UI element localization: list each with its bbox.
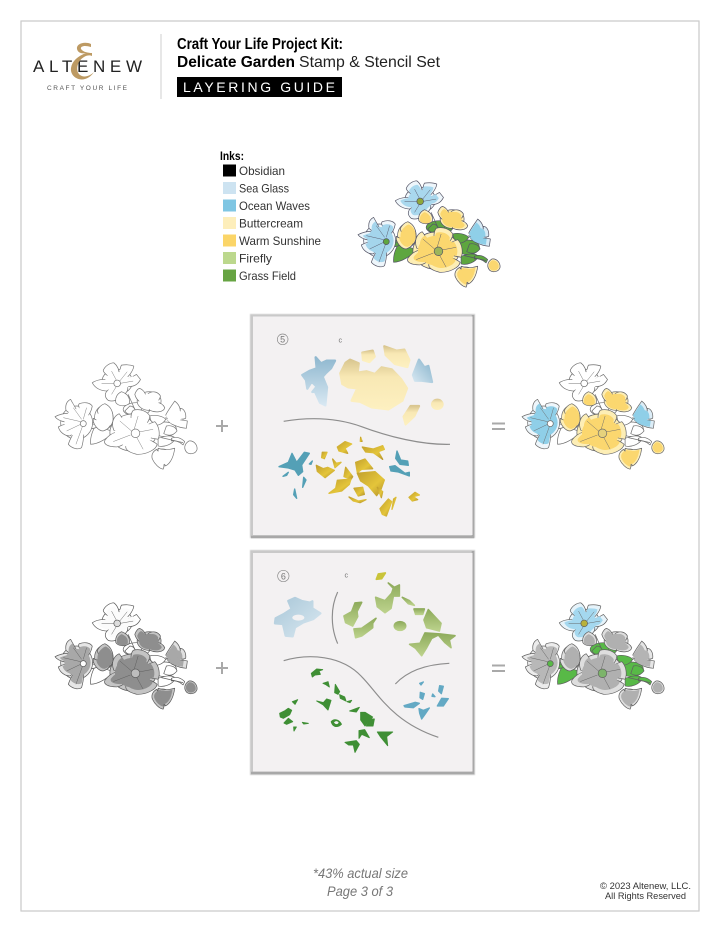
- ink legend: Buttercream: [239, 216, 303, 230]
- footnote: [313, 865, 408, 899]
- dark green cut-outs: [280, 669, 393, 752]
- ink legend: Ocean Waves: [239, 199, 310, 213]
- title: Delicate Garden: [177, 54, 295, 71]
- stencil number 5: 5: [280, 335, 285, 345]
- footnote: Page 3 of 3: [327, 883, 393, 899]
- stencil divider curve: [284, 419, 450, 444]
- copyright: All Rights Reserved: [605, 891, 686, 902]
- ink legend: Sea Glass: [239, 182, 289, 196]
- panel: stencil 6: [250, 550, 475, 775]
- ink legend: Inks:: [220, 149, 244, 163]
- title: Stamp & Stencil Set: [299, 54, 441, 71]
- plus sign row 2: [216, 662, 228, 674]
- finished flower illustration: [358, 181, 500, 287]
- title: [177, 36, 441, 71]
- stencil divider curves: [284, 592, 449, 737]
- pale blue cut-out: [275, 598, 320, 636]
- ink legend: Warm Sunshine: [239, 234, 321, 248]
- logo: Altenew: ALTENEW: [33, 57, 142, 76]
- ink legend: Firefly: [239, 252, 272, 266]
- result flowers: blue and green: [522, 603, 664, 709]
- yellow and olive cut-outs: [344, 573, 455, 656]
- panel: stencil 5: [250, 314, 475, 538]
- copyright: [600, 881, 691, 902]
- footnote: *43% actual size: [313, 865, 408, 881]
- ink legend: Obsidian: [239, 164, 285, 178]
- stencil number 5: [277, 334, 288, 345]
- pale blue and cream cut-outs: [302, 346, 444, 424]
- ink legend: Grass Field: [239, 269, 296, 283]
- title: Craft Your Life Project Kit:: [177, 36, 343, 53]
- equals sign row 2: [492, 666, 505, 671]
- stencil number 6: 6: [281, 571, 286, 581]
- logo: Altenew: [33, 43, 142, 92]
- ink legend: [220, 149, 321, 283]
- stamp outline flowers: [55, 363, 197, 469]
- stencil letter c: c: [338, 336, 342, 345]
- plus sign row 1: [216, 420, 228, 432]
- subtitle badge: layering guide: LAYERING GUIDE: [183, 79, 335, 95]
- result flowers: blue and yellow: [522, 363, 664, 469]
- stencil number 6: [278, 570, 289, 582]
- stencil letter c: c: [344, 571, 348, 580]
- teal cut-outs: [404, 682, 448, 719]
- stamp shaded grey flowers: [55, 603, 197, 709]
- copyright: © 2023 Altenew, LLC.: [600, 881, 691, 892]
- logo: Altenew: CRAFT YOUR LIFE: [47, 85, 128, 92]
- equals sign row 1: [492, 424, 505, 429]
- header divider: [160, 34, 162, 99]
- teal and gold cut-outs: [279, 437, 419, 516]
